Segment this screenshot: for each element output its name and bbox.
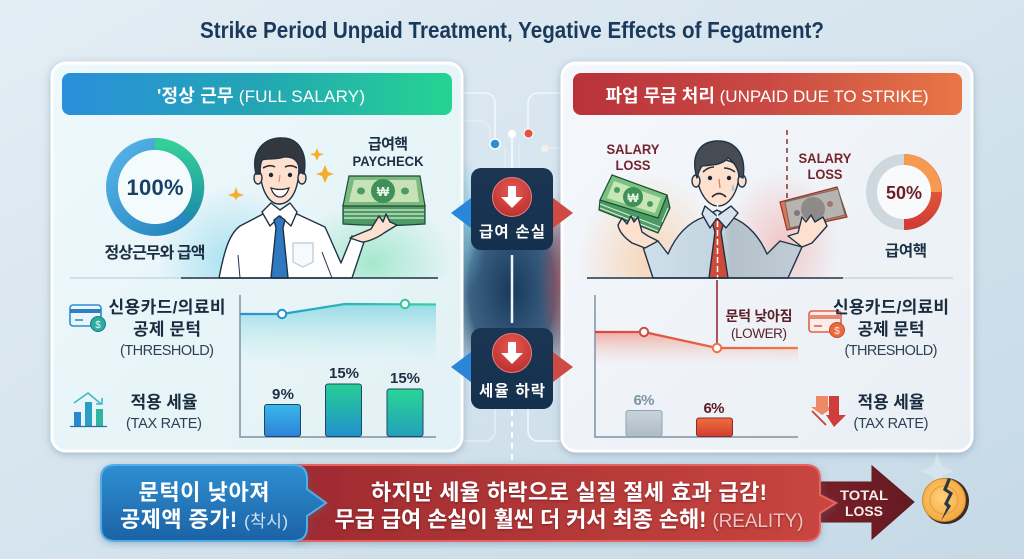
label: salary loss right: LOSS bbox=[808, 167, 842, 182]
chart: threshold line and tax bars: 15% bbox=[390, 370, 420, 387]
donut: 50 percent: 50% bbox=[886, 183, 922, 203]
label: paycheck: 급여핵 bbox=[368, 136, 408, 153]
donut: 100 percent bbox=[112, 144, 198, 230]
chart: lowered threshold and tax bars: 6% bbox=[704, 400, 724, 417]
callout: reality: 하지만 세율 하락으로 실질 절세 효과 급감! bbox=[371, 480, 767, 505]
chart: lowered threshold and tax bars: 6% bbox=[634, 392, 654, 409]
circuit connector lines bbox=[463, 93, 561, 441]
icon: down arrow bbox=[492, 178, 532, 216]
label: tax rate: 적용 세율 bbox=[130, 393, 198, 412]
label: normal pay: 정상근무와 급액 bbox=[104, 244, 206, 262]
connector line bbox=[511, 255, 513, 323]
icon: faded banknote bbox=[780, 187, 847, 230]
face: worried bbox=[703, 167, 735, 197]
callout: illusion: 문턱이 낮아져 bbox=[138, 480, 270, 505]
center badge: salary loss: 급여 손실 bbox=[479, 223, 545, 241]
icon: credit card loss: $ bbox=[834, 326, 840, 337]
label: threshold lowered bbox=[726, 308, 792, 341]
callout: illusion bbox=[101, 465, 326, 541]
arrow: total loss: LOSS bbox=[845, 503, 883, 519]
heading: unpaid due to strike: 파업 무급 처리 (UNPAID DUE TO STRIKE) bbox=[606, 86, 928, 106]
dashed split line bbox=[718, 130, 787, 280]
label: paycheck: PAYCHECK bbox=[352, 154, 424, 169]
label: pay amount: 급여핵 bbox=[885, 242, 927, 260]
label: tax rate: 적용 세율 bbox=[858, 393, 924, 412]
chart: threshold line and tax bars: 9% bbox=[272, 386, 294, 403]
chart: threshold line and tax bars: 15% bbox=[329, 365, 359, 382]
label: threshold: (THRESHOLD) bbox=[120, 343, 214, 359]
icon: broken coin bbox=[922, 478, 969, 524]
icon: cash stack: ₩ bbox=[377, 184, 390, 199]
icon: cash held: ₩ bbox=[627, 191, 639, 205]
label: tax rate bbox=[854, 393, 928, 432]
heading: full salary bbox=[62, 73, 452, 115]
label: salary loss right: SALARY bbox=[798, 151, 852, 166]
dashed line down bbox=[511, 410, 513, 464]
icon: cash held bbox=[599, 175, 670, 233]
label: threshold lowered: (LOWER) bbox=[731, 326, 787, 341]
center badge: salary loss bbox=[471, 168, 553, 250]
label: tax rate bbox=[126, 393, 202, 432]
label: threshold: 신용카드/의료비 bbox=[833, 298, 949, 317]
label: salary loss right bbox=[798, 151, 852, 182]
divider bbox=[70, 277, 181, 279]
icon: cash stack bbox=[343, 176, 425, 226]
callout: illusion: 공제액 증가! (착시) bbox=[120, 507, 288, 532]
icon: falling arrows bbox=[811, 396, 846, 427]
callout: reality bbox=[295, 465, 836, 541]
chart: lowered threshold and tax bars bbox=[595, 280, 798, 437]
arrow: total loss: TOTAL bbox=[840, 487, 888, 503]
label: threshold lowered: 문턱 낮아짐 bbox=[726, 308, 792, 324]
icon: credit card loss bbox=[809, 311, 844, 338]
icon: bars with arrow bbox=[70, 393, 107, 426]
donut: 100 percent: 100% bbox=[126, 175, 184, 200]
sparkle bbox=[920, 454, 954, 487]
panel background glow bbox=[587, 183, 830, 278]
illustration: worried worker bbox=[618, 141, 827, 278]
chart: threshold line and tax bars bbox=[240, 295, 436, 437]
illustration: smiling worker bbox=[219, 138, 397, 278]
label: threshold bbox=[108, 298, 226, 359]
donut: 50 percent bbox=[872, 160, 936, 224]
label: tax rate: (TAX RATE) bbox=[854, 416, 928, 432]
callout: reality: 무급 급여 손실이 훨씬 더 커서 최종 손해! (REALITY) bbox=[334, 507, 804, 532]
label: salary loss left bbox=[606, 142, 660, 173]
center badge: tax drop bbox=[471, 328, 553, 409]
label: paycheck bbox=[352, 136, 424, 169]
title: Strike Period Unpaid Treatment, Yegative Effects of Fegatment? bbox=[200, 17, 824, 43]
panel: full salary bbox=[52, 63, 462, 451]
label: threshold: 공제 문턱 bbox=[133, 320, 201, 339]
label: tax rate: (TAX RATE) bbox=[126, 416, 202, 432]
label: salary loss left: SALARY bbox=[606, 142, 660, 157]
arrow: total loss bbox=[812, 466, 914, 539]
label: threshold: 신용카드/의료비 bbox=[108, 298, 226, 317]
dots bbox=[490, 129, 549, 152]
center arrows bbox=[451, 198, 573, 382]
panel background glow bbox=[167, 197, 442, 278]
divider bbox=[587, 277, 843, 279]
icon: down arrow bbox=[492, 334, 532, 372]
face: smiling bbox=[263, 166, 297, 197]
panel: unpaid due to strike bbox=[562, 63, 972, 451]
icon: credit card bbox=[70, 305, 106, 332]
label: threshold bbox=[833, 298, 949, 359]
icon: sparkles bbox=[228, 148, 334, 200]
label: salary loss left: LOSS bbox=[616, 158, 650, 173]
heading: unpaid due to strike bbox=[573, 73, 962, 115]
label: threshold: (THRESHOLD) bbox=[844, 343, 938, 359]
icon: credit card: $ bbox=[95, 320, 101, 331]
label: threshold: 공제 문턱 bbox=[858, 320, 924, 339]
heading: full salary: '정상 근무 (FULL SALARY) bbox=[157, 86, 365, 106]
center badge: tax drop: 세율 하락 bbox=[479, 382, 545, 400]
central glow bbox=[436, 155, 591, 408]
